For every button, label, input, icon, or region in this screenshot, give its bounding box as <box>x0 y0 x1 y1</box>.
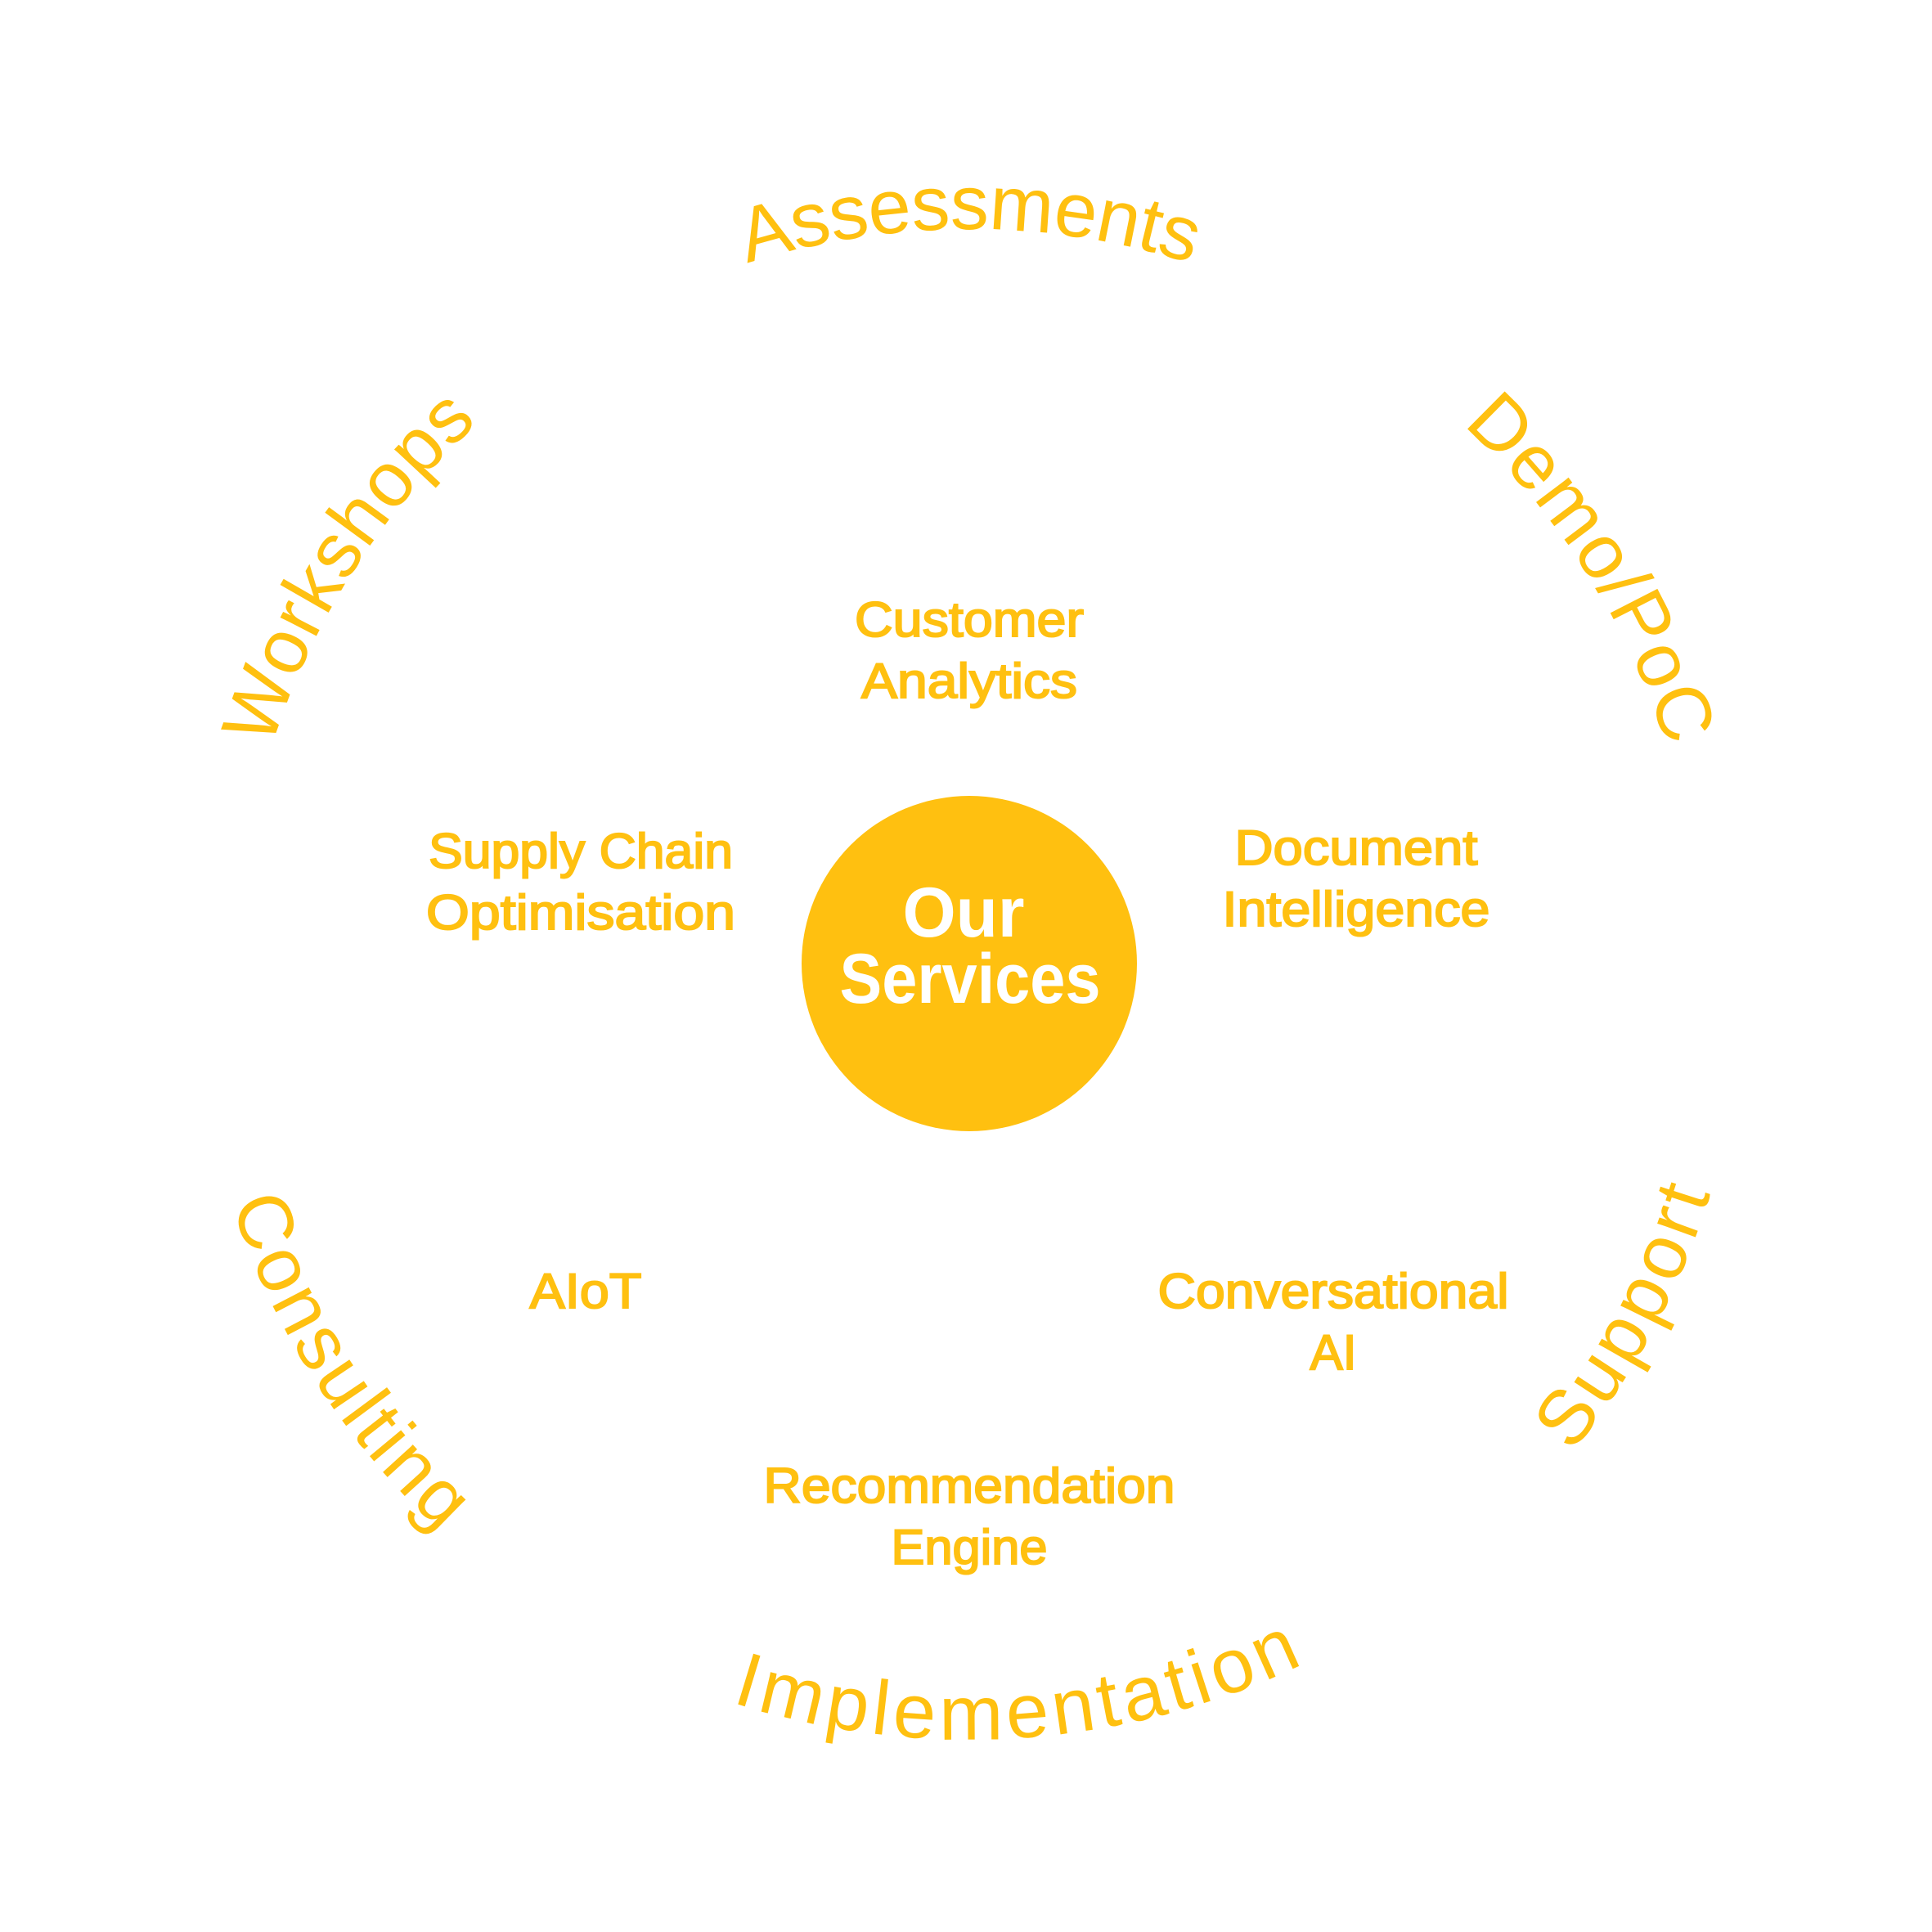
center circle: Our Services: Services <box>839 940 1101 1018</box>
inner label: Conversational AI: AI <box>1310 1325 1356 1380</box>
inner label: Supply Chain Optimisation <box>426 824 735 940</box>
inner label: Recommendation Engine: Recommendation <box>764 1458 1175 1513</box>
inner label: Recommendation Engine <box>764 1458 1175 1575</box>
inner label: Recommendation Engine: Engine <box>892 1520 1047 1575</box>
inner label: Conversational AI: Conversational <box>1158 1264 1508 1319</box>
inner label: Customer Analytics: Customer <box>855 592 1084 647</box>
outer label: Consulting: Consulting <box>239 1196 466 1534</box>
inner label: Conversational AI <box>1158 1264 1508 1380</box>
center circle: Our Services: Our <box>903 874 1024 952</box>
outer label: Support: Support <box>1539 1183 1710 1445</box>
inner label: Supply Chain Optimisation: Optimisation <box>426 885 735 940</box>
outer label: Workshops: Workshops <box>221 400 472 733</box>
inner label: Supply Chain Optimisation: Supply Chain <box>429 824 733 878</box>
outer label: Implementation: Implementation <box>738 1632 1299 1744</box>
center circle: Our Services <box>802 796 1137 1131</box>
outer label: Assessments: Assessments <box>748 188 1197 263</box>
inner label: Document Intelligence: Document <box>1235 820 1478 875</box>
inner label: Customer Analytics <box>855 592 1084 708</box>
outer label: Demo/PoC: Demo/PoC <box>1467 391 1711 740</box>
inner label: Customer Analytics: Analytics <box>861 654 1077 708</box>
inner label: Document Intelligence <box>1222 820 1490 937</box>
inner label: Document Intelligence: Intelligence <box>1222 882 1490 937</box>
inner label: AIoT: AIoT <box>530 1264 641 1319</box>
